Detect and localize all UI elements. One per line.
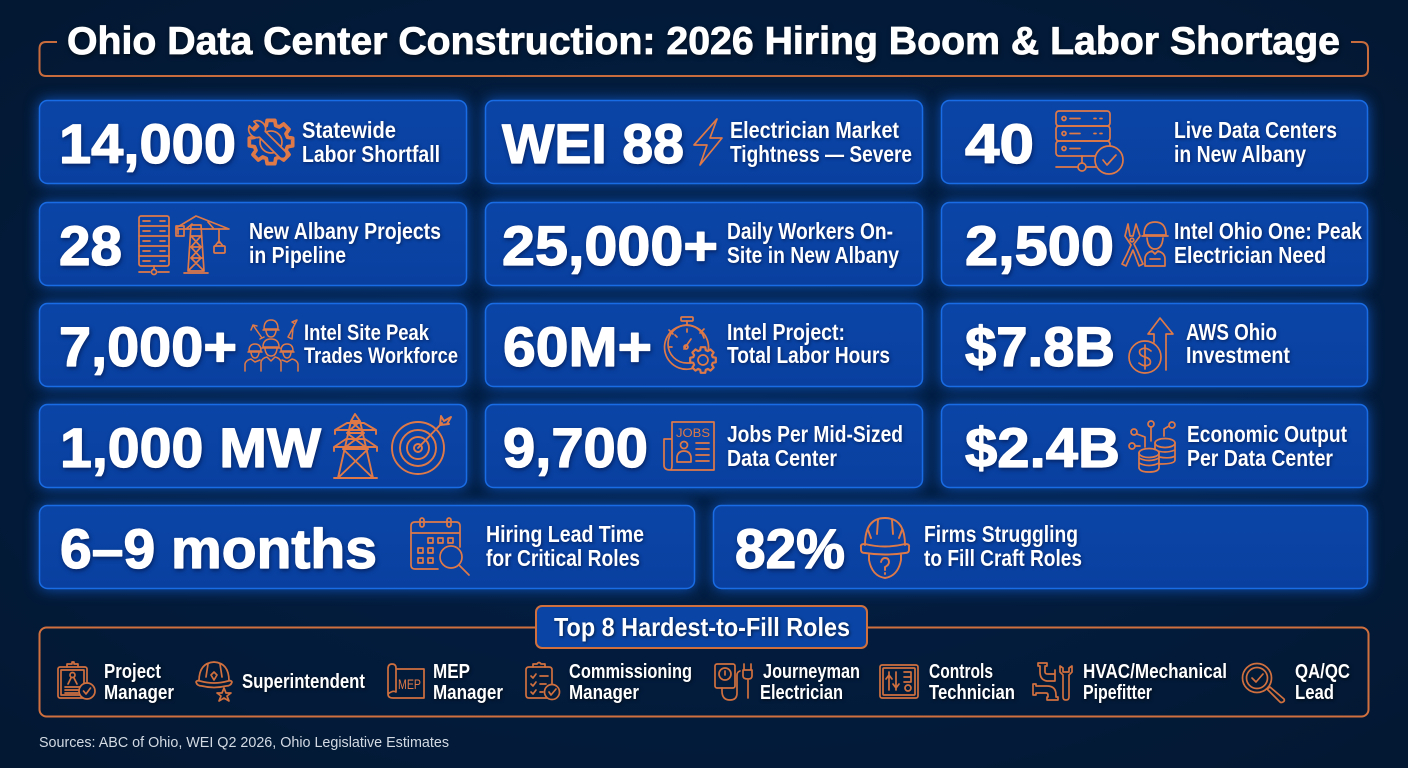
panel: intel labor hours: [486, 304, 922, 386]
icon: lightning bolt: [694, 119, 722, 165]
panel: top 8 hardest-to-fill roles: [40, 606, 1368, 716]
role: controls technician: Technician: [929, 682, 1015, 704]
panel: 1,000 MW: [40, 404, 466, 488]
icon: jobs newspaper: JOBS: [676, 426, 710, 440]
label: Site in New Albany: [727, 242, 899, 268]
stat: 28: 28: [59, 214, 122, 277]
title frame: [40, 42, 1368, 76]
stat: 7,000+: 7,000+: [59, 315, 237, 378]
panel: firms struggling: [714, 506, 1368, 588]
badge heading: Top 8 Hardest-to-Fill Roles: [554, 612, 850, 642]
label: [1187, 421, 1347, 471]
role: commissioning manager: [526, 661, 692, 704]
label: [304, 320, 458, 368]
title: Ohio Data Center Construction: 2026 Hiring Boom & Labor Shortage: [67, 20, 1340, 63]
label: [727, 319, 890, 368]
icon: server rack: [139, 216, 169, 274]
badge heading: [536, 606, 867, 648]
stat: 40: 40: [965, 112, 1034, 175]
panel: electrician market tightness: [486, 100, 922, 184]
label: Intel Project:: [727, 319, 845, 345]
label: [486, 521, 644, 571]
role: project manager: Project: [104, 661, 161, 683]
panel: intel ohio one electricians: [942, 202, 1368, 286]
label: Data Center: [727, 445, 837, 471]
stat: 82%: 82%: [735, 517, 845, 580]
label: Live Data Centers: [1174, 117, 1337, 143]
role: journeyman electrician: Electrician: [760, 682, 843, 704]
role: project manager: Manager: [104, 682, 174, 704]
label: Trades Workforce: [304, 343, 458, 368]
role: MEP manager: MEP: [433, 661, 470, 683]
role: HVAC/mechanical pipefitter: HVAC/Mechanical: [1083, 661, 1227, 683]
label: New Albany Projects: [249, 218, 441, 244]
label: Daily Workers On-: [727, 218, 893, 244]
role: MEP manager: MEP: [398, 676, 421, 692]
label: Hiring Lead Time: [486, 521, 644, 547]
label: Tightness — Severe: [730, 141, 912, 167]
role: controls technician: Controls: [929, 661, 993, 683]
panel: live data centers: [942, 100, 1368, 184]
label: for Critical Roles: [486, 545, 640, 571]
label: in New Albany: [1174, 141, 1306, 167]
role: HVAC/mechanical pipefitter: [1033, 661, 1227, 704]
icon: jobs newspaper: [664, 422, 714, 470]
label: Economic Output: [1187, 421, 1347, 447]
label: AWS Ohio: [1186, 319, 1277, 345]
role: journeyman electrician: Journeyman: [763, 661, 860, 683]
panel: new albany projects: [40, 202, 466, 286]
label: in Pipeline: [249, 242, 346, 268]
role: journeyman electrician: [715, 661, 860, 704]
panel: intel site workforce: [40, 304, 466, 386]
label: [727, 218, 899, 268]
panel: daily workers: [486, 202, 922, 286]
label: Jobs Per Mid-Sized: [727, 421, 903, 447]
panel: economic output: [942, 404, 1368, 488]
label: [1186, 319, 1290, 368]
label: [924, 521, 1082, 571]
icon: crane: [176, 216, 229, 273]
role: project manager: [58, 661, 174, 704]
stat: WEI 88: WEI 88: [502, 112, 684, 175]
label: Per Data Center: [1187, 445, 1333, 471]
stat: 60M+: 60M+: [503, 315, 652, 378]
role: commissioning manager: Manager: [569, 682, 639, 704]
label: Electrician Market: [730, 117, 899, 143]
icon: calendar with magnifier: [411, 518, 469, 575]
label: Statewide: [302, 117, 396, 143]
role: MEP manager: Manager: [433, 682, 503, 704]
sources: Sources: ABC of Ohio, WEI Q2 2026, Ohio Legislative Estimates: [39, 734, 449, 751]
label: Electrician Need: [1174, 242, 1326, 268]
icon: trades workers: [245, 320, 298, 371]
label: to Fill Craft Roles: [924, 545, 1082, 571]
role: commissioning manager: Commissioning: [569, 661, 692, 683]
icon: target with arrow: [392, 416, 451, 474]
stat: $7.8B: $7.8B: [965, 315, 1115, 378]
role: MEP manager: [388, 661, 503, 704]
role: QA/QC lead: [1242, 661, 1350, 704]
panel: hiring lead time: [40, 506, 694, 588]
role: superintendent: [196, 662, 365, 701]
icon: wrench and gear: [246, 118, 293, 164]
icon: pliers and electrician: [1122, 222, 1168, 266]
stat: 6–9 months: 6–9 months: [60, 517, 377, 580]
panel: aws investment: [942, 304, 1368, 386]
label: [727, 421, 903, 471]
role: HVAC/mechanical pipefitter: Pipefitter: [1083, 682, 1152, 704]
label: [1174, 117, 1337, 167]
stat: $2.4B: $2.4B: [965, 416, 1120, 479]
label: Labor Shortfall: [302, 141, 440, 167]
icon: transmission tower: [334, 414, 377, 478]
label: [1174, 218, 1362, 268]
icon: hard hat with question mark: [861, 518, 909, 578]
stat: 1,000 MW: 1,000 MW: [60, 416, 321, 479]
role: QA/QC lead: Lead: [1295, 682, 1334, 704]
icon: server with check: [1056, 111, 1123, 174]
role: QA/QC lead: QA/QC: [1295, 661, 1350, 683]
icon: data coins: [1129, 421, 1175, 472]
panel: jobs per data center: [486, 404, 922, 488]
icon: money with up arrow: [1129, 318, 1173, 373]
label: [730, 117, 912, 167]
stat: 14,000: 14,000: [59, 112, 236, 175]
icon: stopwatch and gear: [665, 317, 716, 373]
label: Intel Site Peak: [304, 320, 430, 345]
label: Firms Struggling: [924, 521, 1078, 547]
stat: 9,700: 9,700: [503, 416, 648, 479]
role: superintendent: Superintendent: [242, 671, 365, 693]
label: Intel Ohio One: Peak: [1174, 218, 1362, 244]
panel: statewide labor shortfall: [40, 100, 466, 184]
stat: 2,500: 2,500: [965, 214, 1114, 277]
label: [249, 218, 441, 268]
label: Total Labor Hours: [727, 342, 890, 368]
label: [302, 117, 440, 167]
label: Investment: [1186, 342, 1290, 368]
role: controls technician: [880, 661, 1015, 704]
stat: 25,000+: 25,000+: [502, 214, 718, 277]
